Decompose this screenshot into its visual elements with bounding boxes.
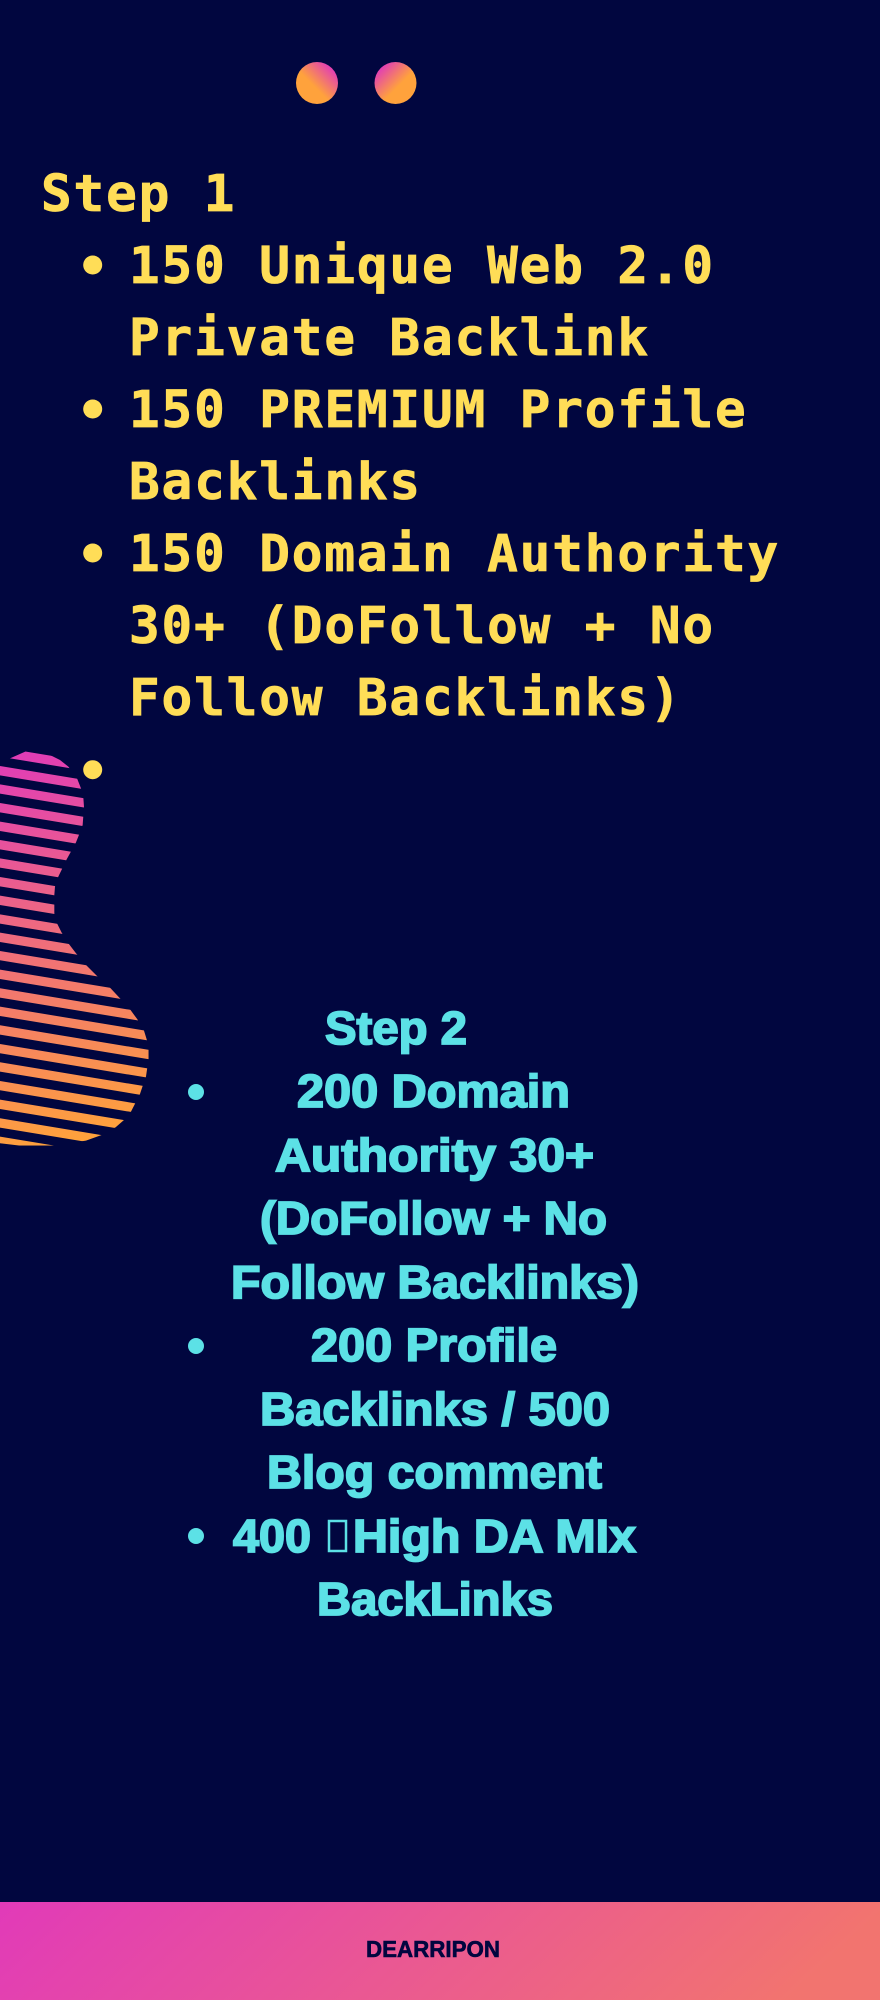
step 2 list item 2 [188, 1319, 610, 1498]
step 1 list item 2: Backlinks [129, 453, 422, 512]
step 2 list item 1 [188, 1065, 639, 1308]
step 1 heading: Step 1 [41, 165, 236, 224]
step 1 list item 2 [83, 381, 748, 512]
step 2 text block [188, 1002, 639, 1625]
step 1 list item 2: 150 PREMIUM Profile [129, 381, 748, 440]
striped gradient blob [0, 747, 153, 1171]
step 1 list item 1: Private Backlink [129, 309, 650, 368]
step 1 list item 1: 150 Unique Web 2.0 [129, 237, 715, 296]
step 2 list item 2: Blog comment [267, 1446, 602, 1498]
step 2 heading: Step 2 [325, 1002, 467, 1054]
step 1 list item 3 [83, 525, 780, 728]
footer bar [0, 1902, 880, 2000]
step 2 list item 1: Authority 30+ [275, 1129, 594, 1181]
step 2 list item 1: (DoFollow + No [260, 1192, 607, 1244]
step 2 list item 3: BackLinks [317, 1573, 553, 1625]
step 2 list item 3 [188, 1510, 636, 1625]
step 1 list item 3: Follow Backlinks) [129, 669, 682, 728]
step 1 list item 1 [83, 237, 715, 368]
step 2 list item 2: Backlinks / 500 [260, 1383, 610, 1435]
step 2 list item 1: Follow Backlinks) [231, 1256, 639, 1308]
footer brand name: DEARRIPON [366, 1936, 500, 1962]
step 1 empty bullet [83, 760, 102, 779]
decorative dots [296, 62, 416, 104]
step 2 list item 3: 400 [233, 1510, 311, 1562]
step 1 list item 3: 150 Domain Authority [129, 525, 780, 584]
step 2 list item 1: 200 Domain [297, 1065, 570, 1117]
step 2 list item 3: High DA MIx [353, 1510, 636, 1562]
step 1 text block [41, 165, 780, 779]
step 1 list item 3: 30+ (DoFollow + No [129, 597, 715, 656]
step 2 list item 2: 200 Profile [311, 1319, 557, 1371]
